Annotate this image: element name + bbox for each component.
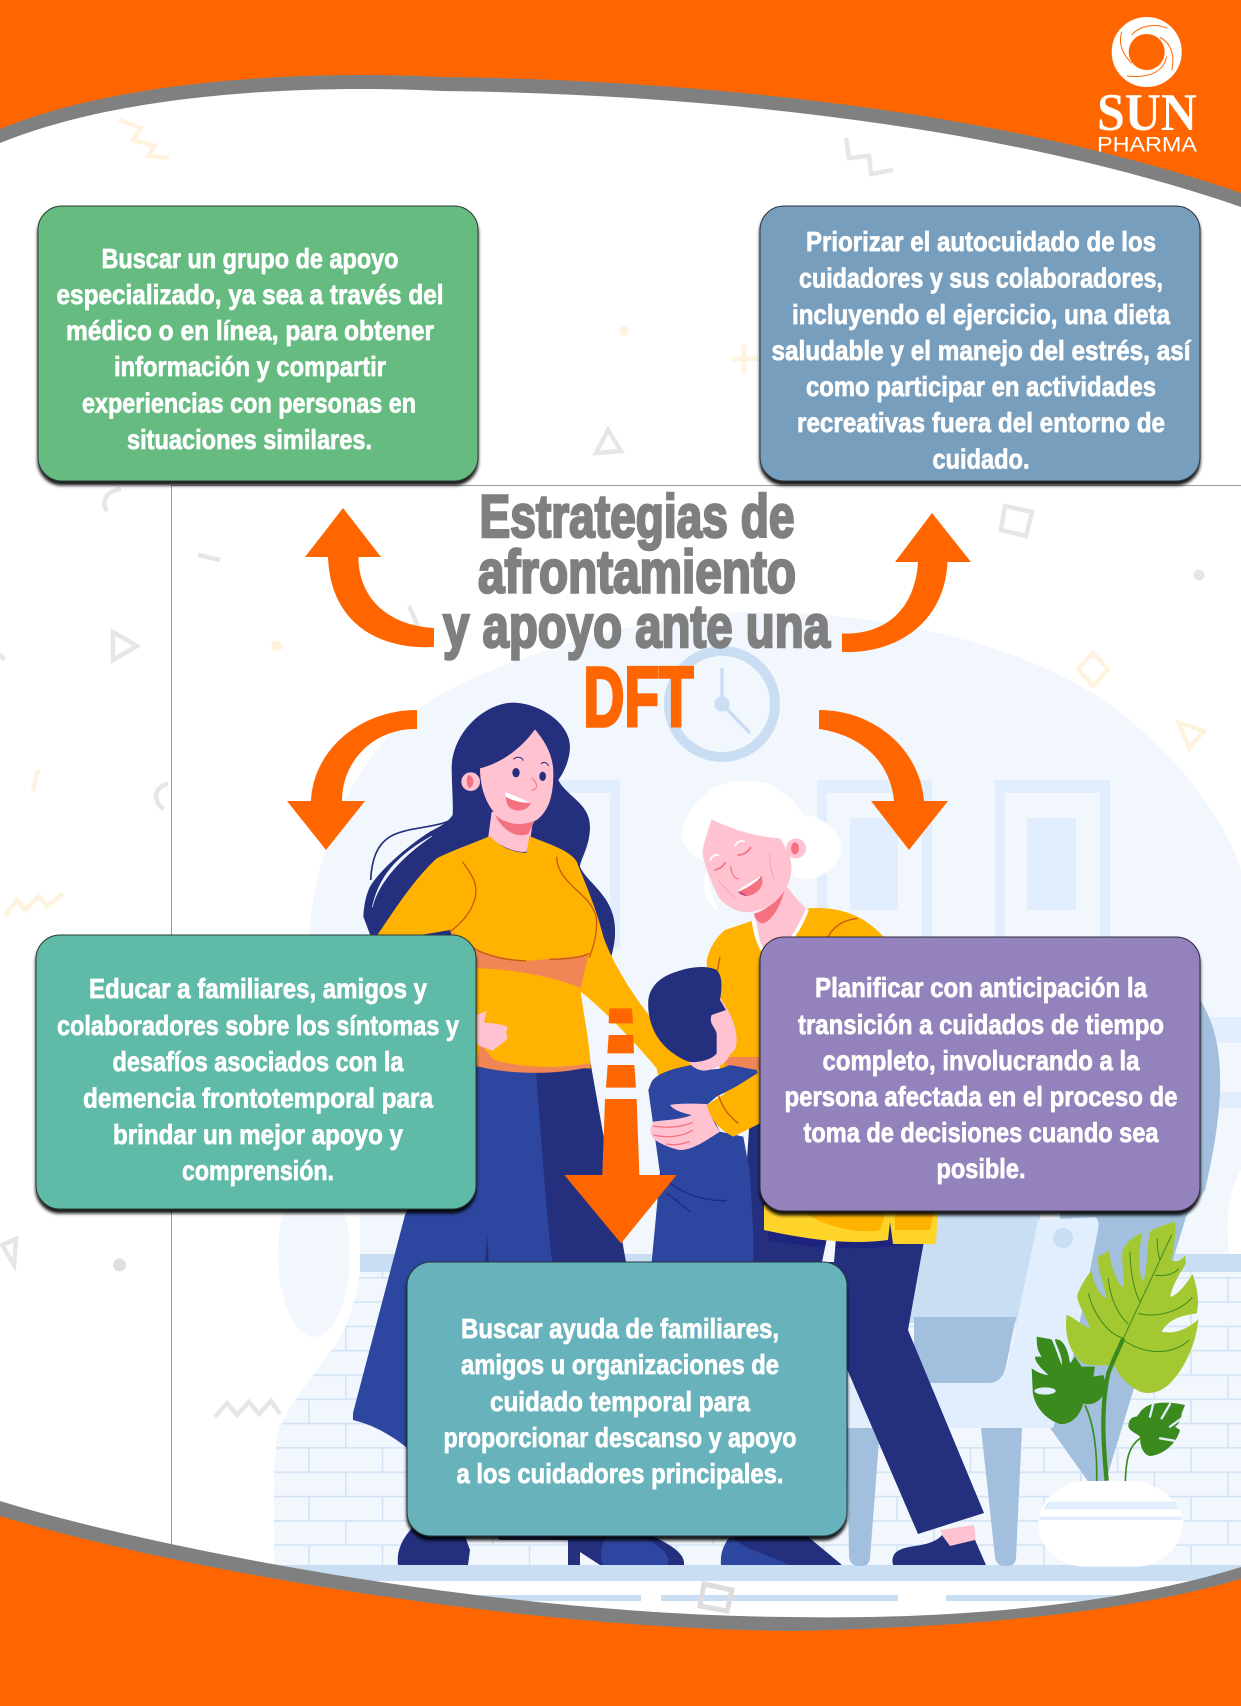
skirt: [353, 1060, 552, 1540]
panel: self care: saludable y el manejo del estrés, así: [772, 335, 1192, 366]
thin guide lines: [171, 485, 1241, 1545]
side wall bands: [1200, 1017, 1241, 1043]
arrow: bottom left: [287, 710, 417, 850]
panel: support group: Buscar un grupo de apoyo: [102, 243, 398, 274]
panel: planning: transición a cuidados de tiempo: [798, 1009, 1164, 1040]
marks over banner edge: [119, 120, 893, 174]
jacket: [648, 1065, 758, 1280]
grandmother's sleeve: [707, 1072, 760, 1137]
hair: [363, 703, 615, 960]
clock: [669, 651, 775, 757]
hair: [648, 967, 726, 1062]
panel: planning: persona afectada en el proceso de: [784, 1081, 1178, 1112]
panel: planning: [760, 937, 1200, 1211]
panel: respite help: [407, 1262, 847, 1536]
title: y apoyo ante una: [443, 593, 830, 660]
panel: self care: recreativas fuera del entorno de: [797, 407, 1165, 438]
decorative square over floor: [700, 1584, 732, 1611]
trousers: [740, 1100, 984, 1560]
panel: respite help: cuidado temporal para: [490, 1386, 750, 1417]
shoes and socks: [940, 1525, 976, 1550]
logo: Sun Pharma: SUN: [1097, 84, 1197, 142]
panel: self care: incluyendo el ejercicio, una dieta: [792, 299, 1170, 330]
floor: [276, 1565, 1241, 1581]
icon: swirl: [1120, 26, 1173, 78]
stems: [1085, 1405, 1140, 1482]
logo: Sun Pharma: PHARMA: [1097, 134, 1197, 156]
decorative background marks: [0, 170, 1204, 1417]
sweater: [372, 836, 693, 1083]
illustration: woman: [353, 703, 693, 1565]
bottom orange banner: [0, 1501, 1241, 1706]
pot: [1038, 1481, 1183, 1567]
panel: self care: Priorizar el autocuidado de los: [806, 226, 1156, 257]
arrow: down dashed: [564, 1008, 677, 1243]
arrow: top left: [305, 508, 434, 647]
face: [688, 993, 737, 1071]
panel: respite help: proporcionar descanso y apoyo: [444, 1422, 796, 1453]
panel: respite help: a los cuidadores principales.: [456, 1458, 784, 1489]
panel: educate: comprensión.: [182, 1155, 334, 1186]
panel: support group: médico o en línea, para obtener: [66, 315, 434, 346]
panel: planning: posible.: [936, 1153, 1026, 1184]
panel: respite help: Buscar ayuda de familiares,: [461, 1313, 779, 1344]
panel: planning: toma de decisiones cuando sea: [804, 1117, 1159, 1148]
panel: educate: [36, 935, 476, 1209]
panel: educate: Educar a familiares, amigos y: [89, 973, 427, 1004]
panel: educate: colaboradores sobre los síntomas y: [57, 1010, 459, 1041]
top orange banner: [0, 0, 1241, 300]
title: DFT: [584, 650, 694, 744]
panel: educate: demencia frontotemporal para: [83, 1082, 433, 1114]
vase shape left: [278, 1173, 350, 1337]
panel: support group: especializado, ya sea a través del: [56, 279, 444, 310]
large leaf: [1066, 1222, 1198, 1393]
title: Estrategias de: [480, 483, 794, 550]
title: [443, 483, 830, 744]
logo: Sun Pharma: [1097, 26, 1197, 156]
panel: self care: cuidado.: [932, 444, 1030, 474]
arrow: bottom right: [819, 710, 948, 850]
panel: support group: situaciones similares.: [127, 424, 372, 455]
illustration: potted plant: [1032, 1222, 1198, 1567]
jacket hem: [764, 1205, 938, 1244]
panel: planning: completo, involucrando a la: [822, 1045, 1140, 1076]
decorative diamond and triangle over wall: [1078, 653, 1204, 748]
shoes: [398, 1528, 470, 1565]
panel: planning: Planificar con anticipación la: [815, 972, 1147, 1003]
panel: support group: información y compartir: [114, 351, 386, 382]
brick wall: [274, 1272, 1241, 1566]
panel: support group: [38, 206, 478, 481]
panel: respite help: amigos u organizaciones de: [461, 1349, 779, 1380]
illustration: grandmother: [682, 781, 986, 1565]
white vase right: [1227, 1170, 1241, 1295]
panel: self care: cuidadores y sus colaboradores,: [799, 262, 1163, 294]
panel: educate: desafíos asociados con la: [112, 1046, 404, 1077]
dark left leaf: [1032, 1337, 1107, 1424]
panel: self care: como participar en actividades: [806, 371, 1156, 402]
dome wall: [309, 612, 1241, 1290]
title: afrontamiento: [478, 538, 796, 606]
grandmother's hand: [650, 1104, 720, 1150]
armchair: [830, 1000, 1220, 1566]
small right leaf: [1128, 1403, 1185, 1456]
floor dashes: [396, 1595, 1187, 1601]
illustration: boy: [648, 967, 760, 1280]
panel: self care: [760, 206, 1200, 481]
illustration background: room: [274, 612, 1241, 1601]
panel: support group: experiencias con personas en: [82, 388, 416, 418]
arrow: top right: [842, 513, 971, 652]
windows: [505, 780, 1110, 960]
panel: educate: brindar un mejor apoyo y: [113, 1119, 403, 1150]
